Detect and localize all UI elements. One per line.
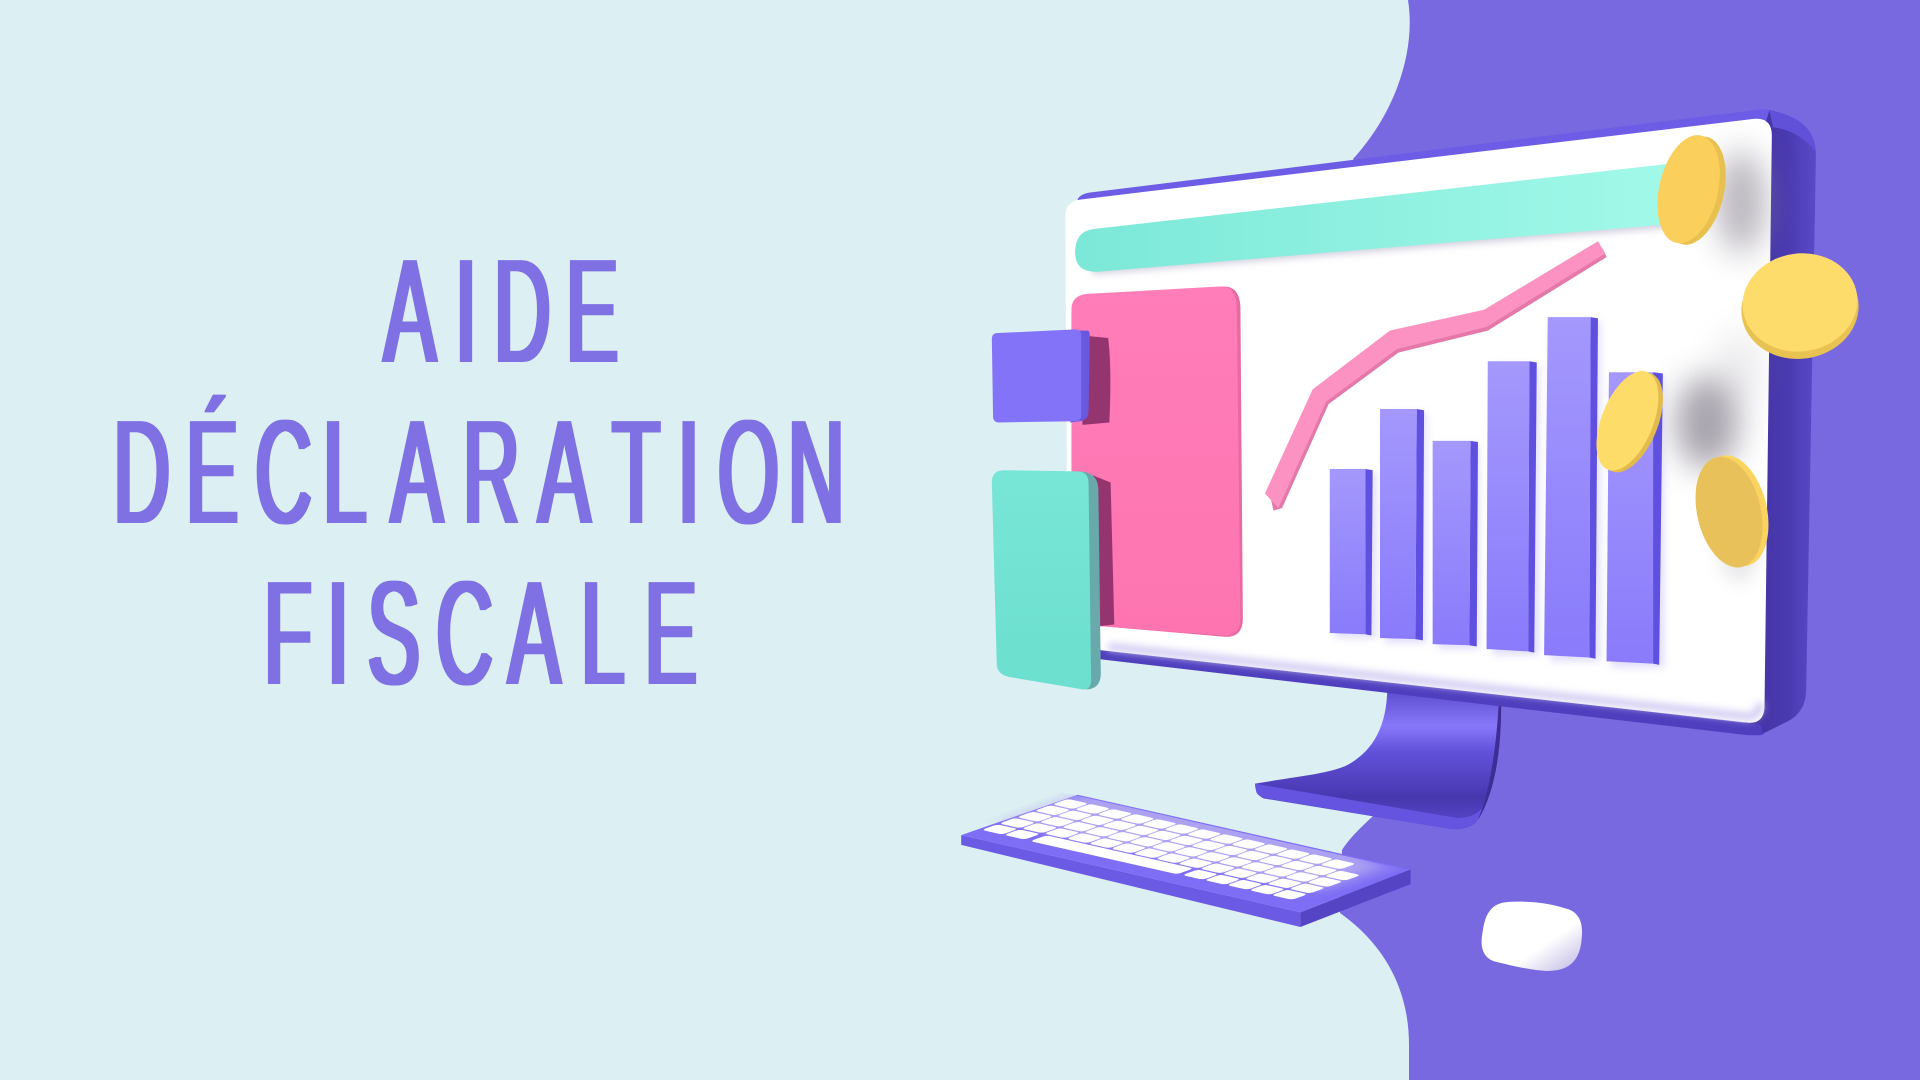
shadow of purple square: [1082, 336, 1110, 425]
coin on chart: [1584, 362, 1676, 481]
bar 5: [1544, 317, 1600, 661]
pink panel: [1071, 286, 1243, 637]
monitor bottom edge: [1096, 647, 1763, 735]
background: purple wavy shape: [1340, 0, 1920, 1080]
bar 4: [1487, 361, 1539, 655]
screen inner shade: [1108, 647, 1760, 716]
coin shadows on screen: [1675, 151, 1766, 582]
trend line: [1265, 241, 1607, 511]
keyboard keys: [981, 799, 1378, 900]
coin lower right: [1685, 449, 1779, 574]
bar 3: [1433, 441, 1479, 649]
purple square card: [992, 329, 1090, 422]
title: FISCALE: [264, 552, 697, 716]
mouse: [1482, 902, 1582, 971]
keyboard base: [961, 795, 1411, 927]
monitor body: [1065, 109, 1816, 735]
coin top: [1648, 129, 1736, 251]
monitor stand: [1255, 686, 1501, 829]
bar 6: [1607, 372, 1664, 667]
monitor right side: [1745, 110, 1816, 735]
monitor corner highlight: [1769, 110, 1816, 152]
bar 1: [1330, 469, 1376, 638]
illustration: computer with chart: [961, 109, 1865, 971]
monitor screen: [1065, 119, 1772, 723]
teal card: [992, 470, 1101, 689]
shadow of teal card: [1092, 475, 1114, 627]
title: [113, 230, 845, 716]
teal header bar: [1075, 163, 1678, 274]
coin right large: [1735, 246, 1865, 366]
monitor top edge: [1078, 109, 1778, 206]
keyboard: [961, 795, 1411, 927]
title: DÉCLARATION: [113, 391, 845, 555]
bar 2: [1380, 409, 1427, 643]
bar chart: [1330, 317, 1664, 667]
title: AIDE: [384, 230, 618, 394]
